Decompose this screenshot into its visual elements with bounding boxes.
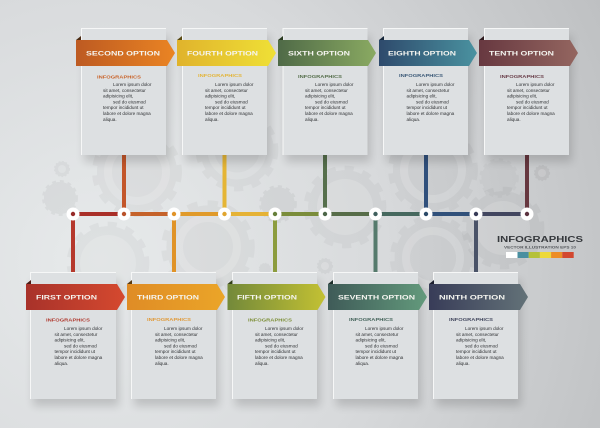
panel: eighth option: aliqua. (406, 117, 420, 122)
panel: fifth option: Lorem ipsum dolor (265, 326, 304, 331)
panel: second option: labore et dolore magna (103, 111, 151, 116)
panel: first option: sit amet, consectetur (54, 332, 98, 337)
panel: eighth option: adipisicing elit, (406, 94, 437, 99)
panel: sixth option: INFOGRAPHICS (298, 74, 342, 79)
panel: seventh option (328, 272, 427, 406)
panel: tenth option (479, 28, 578, 162)
panel: sixth option: aliqua. (305, 117, 319, 122)
background gears (44, 113, 549, 300)
panel: seventh option: SEVENTH OPTION (338, 295, 415, 302)
panel: tenth option: TENTH OPTION (489, 51, 554, 58)
panel: eighth option: Lorem ipsum dolor (416, 82, 455, 87)
panel: sixth option: SIXTH OPTION (288, 51, 350, 58)
panel: fourth option: INFOGRAPHICS (198, 73, 242, 78)
panel: fifth option: INFOGRAPHICS (248, 318, 292, 323)
logo block: infographics: VECTOR ILLUSTRATION EPS 10 (504, 246, 576, 250)
panel: fifth option: sed do eiusmod (265, 343, 298, 348)
panel: fourth option: FOURTH OPTION (187, 51, 258, 58)
panel: first option (26, 272, 125, 406)
panel: third option (127, 272, 225, 406)
timeline nodes (66, 208, 534, 220)
panel: seventh option: adipisicing elit, (356, 338, 386, 343)
panel: third option: INFOGRAPHICS (147, 317, 191, 322)
panel: fourth option: Lorem ipsum dolor (215, 82, 254, 87)
panel: seventh option: tempor incididunt ut (356, 349, 397, 354)
panel: fourth option: sit amet, consectetur (205, 88, 248, 93)
panel: fourth option: sed do eiusmod (215, 99, 248, 104)
logo block: infographics: INFOGRAPHICS (497, 234, 583, 244)
panel: ninth option: sit amet, consectetur (456, 332, 499, 337)
panel: tenth option: Lorem ipsum dolor (516, 82, 555, 87)
panel: third option: Lorem ipsum dolor (164, 326, 203, 331)
panel: ninth option: aliqua. (456, 361, 470, 366)
panel: eighth option: sit amet, consectetur (406, 88, 450, 93)
panel: second option: sed do eiusmod (113, 99, 146, 104)
panel: ninth option: NINTH OPTION (439, 295, 505, 302)
panel: tenth option: tempor incididunt ut (507, 105, 548, 110)
panel: ninth option: labore et dolore magna (456, 355, 504, 360)
panel: eighth option (379, 28, 477, 162)
panel: sixth option: sit amet, consectetur (305, 88, 348, 93)
panel: first option: aliqua. (54, 361, 68, 366)
panel: second option: INFOGRAPHICS (97, 74, 141, 79)
panel: third option: sit amet, consectetur (155, 332, 198, 337)
panel: first option: FIRST OPTION (36, 295, 97, 302)
panel: fifth option: FIFTH OPTION (237, 295, 297, 302)
panel: second option: adipisicing elit, (103, 94, 133, 99)
panel: ninth option: sed do eiusmod (465, 343, 498, 348)
panel: tenth option: labore et dolore magna (507, 111, 555, 116)
panel: fourth option: labore et dolore magna (205, 111, 253, 116)
panel: eighth option: INFOGRAPHICS (399, 73, 443, 78)
panel: seventh option: sit amet, consectetur (356, 332, 399, 337)
panel: eighth option: labore et dolore magna (406, 111, 455, 116)
panel: fourth option: aliqua. (205, 117, 219, 122)
timeline connectors (71, 155, 529, 272)
panel: tenth option: adipisicing elit, (507, 94, 537, 99)
panel: ninth option: INFOGRAPHICS (449, 317, 493, 322)
panel: tenth option: sit amet, consectetur (507, 88, 550, 93)
panel: seventh option: aliqua. (356, 361, 369, 366)
panel: sixth option: labore et dolore magna (305, 111, 353, 116)
panel: third option: tempor incididunt ut (155, 349, 196, 354)
panel: fourth option: adipisicing elit, (205, 94, 235, 99)
panel: tenth option: sed do eiusmod (516, 99, 549, 104)
panel: second option: SECOND OPTION (86, 51, 160, 58)
panel: second option (76, 28, 175, 162)
panel: first option: Lorem ipsum dolor (64, 326, 103, 331)
panel: seventh option: sed do eiusmod (365, 343, 398, 348)
panel: second option: tempor incididunt ut (103, 105, 144, 110)
logo block: infographics (497, 234, 583, 258)
panel: fifth option: tempor incididunt ut (255, 349, 296, 354)
panel: sixth option: Lorem ipsum dolor (315, 82, 354, 87)
panel: sixth option (278, 28, 376, 162)
panel: first option: tempor incididunt ut (54, 349, 96, 354)
panel: first option: sed do eiusmod (64, 343, 97, 348)
panel: ninth option: adipisicing elit, (456, 338, 486, 343)
panel: sixth option: tempor incididunt ut (305, 105, 346, 110)
panel: third option: adipisicing elit, (155, 338, 185, 343)
panel: fifth option: aliqua. (255, 361, 269, 366)
panel: seventh option: labore et dolore magna (356, 355, 404, 360)
panel: first option: INFOGRAPHICS (46, 318, 90, 323)
panel: ninth option: tempor incididunt ut (456, 349, 497, 354)
panel: fifth option: sit amet, consectetur (255, 332, 298, 337)
panel: sixth option: adipisicing elit, (305, 94, 335, 99)
panel: fifth option: adipisicing elit, (255, 338, 285, 343)
panel: fifth option (228, 272, 326, 406)
panel: ninth option: Lorem ipsum dolor (465, 326, 504, 331)
panel: seventh option: Lorem ipsum dolor (365, 326, 404, 331)
panel: third option: sed do eiusmod (164, 343, 197, 348)
panel: third option: aliqua. (155, 361, 169, 366)
panel: ninth option (429, 272, 528, 406)
panel: eighth option: tempor incididunt ut (406, 105, 448, 110)
panel: seventh option: INFOGRAPHICS (349, 317, 393, 322)
panel: eighth option: sed do eiusmod (416, 99, 449, 104)
panel: third option: labore et dolore magna (155, 355, 203, 360)
panel: eighth option: EIGHTH OPTION (388, 51, 456, 58)
panel: tenth option: aliqua. (507, 117, 521, 122)
panel: fourth option: tempor incididunt ut (205, 105, 246, 110)
panel: fourth option (177, 28, 276, 162)
panel: second option: Lorem ipsum dolor (113, 82, 152, 87)
panel: tenth option: INFOGRAPHICS (500, 74, 544, 79)
panel: first option: adipisicing elit, (54, 338, 85, 343)
panel: second option: aliqua. (103, 117, 117, 122)
panel: fifth option: labore et dolore magna (255, 355, 303, 360)
panel: first option: labore et dolore magna (54, 355, 103, 360)
panel: sixth option: sed do eiusmod (315, 99, 348, 104)
panel: second option: sit amet, consectetur (103, 88, 146, 93)
panel: third option: THIRD OPTION (137, 295, 199, 302)
